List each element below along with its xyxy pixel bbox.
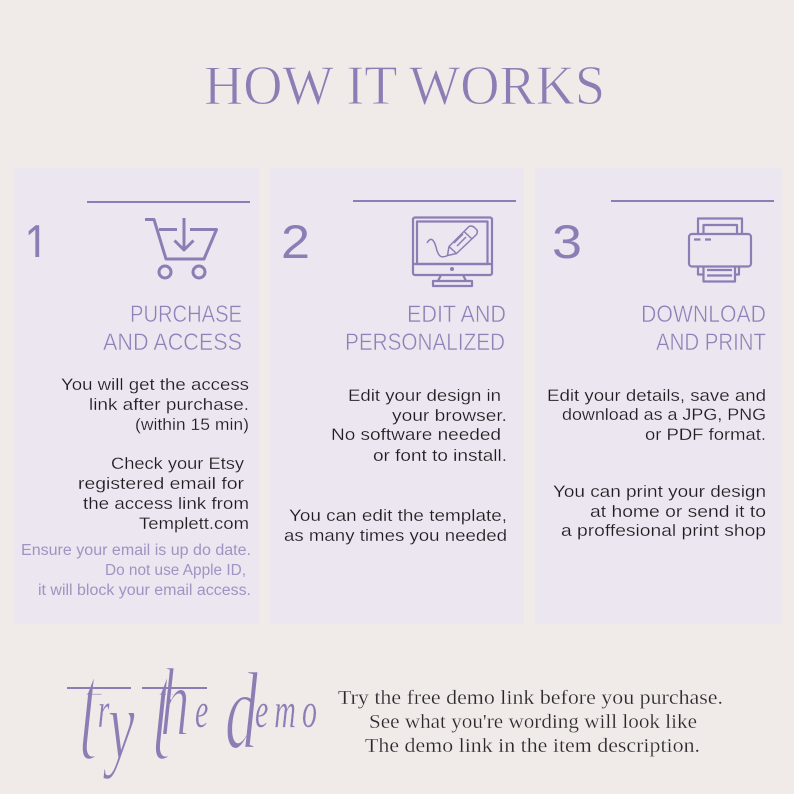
text: check etsy email: the access link from <box>83 494 249 513</box>
text: save and download: download as a JPG, PNG <box>562 405 766 424</box>
heading: download and print: AND PRINT <box>656 329 766 356</box>
script heading: try the demo: t <box>77 627 104 793</box>
text: save and download: Edit your details, save and <box>547 386 766 405</box>
text: demo invitation: Try the free demo link before you purchase. <box>338 687 723 709</box>
note: email warning <box>21 542 251 599</box>
text: unlimited edits: You can edit the template, <box>289 506 507 525</box>
text: check etsy email <box>78 454 249 533</box>
step number 2: 2 <box>281 215 310 268</box>
panel: step 2 edit and personalized <box>270 168 524 624</box>
text: edit in browser: your browser. <box>392 406 507 425</box>
script heading: try the demo <box>67 627 323 793</box>
heading: edit and personalized <box>345 301 506 356</box>
text: demo invitation: See what you're wording will look like <box>369 711 697 733</box>
text: edit in browser: or font to install. <box>373 446 507 465</box>
script heading: try the demo: d <box>225 650 258 772</box>
note: email warning: Do not use Apple ID, <box>105 562 246 579</box>
heading: purchase and access <box>103 301 242 356</box>
step number 3: 3 <box>552 215 582 268</box>
text: check etsy email: registered email for <box>78 474 244 493</box>
step number 1: 1 <box>24 215 48 273</box>
text: check etsy email: Check your Etsy <box>111 454 245 473</box>
panel: step 3 download and print <box>535 168 782 624</box>
panel: step 1 purchase and access <box>22 201 250 598</box>
text: check etsy email: Templett.com <box>139 514 249 533</box>
text: print options: at home or send it to <box>590 502 766 521</box>
script heading: try the demo: h <box>160 649 190 757</box>
heading: download and print <box>641 301 766 356</box>
icon: monitor with pencil <box>413 218 492 286</box>
text: access link details <box>61 375 249 434</box>
title: HOW IT WORKS <box>204 55 605 117</box>
icon: printer <box>689 218 751 282</box>
text: edit in browser: No software needed <box>331 425 501 444</box>
note: email warning: it will block your email access. <box>38 582 251 599</box>
text: unlimited edits <box>284 506 507 545</box>
text: edit in browser: Edit your design in <box>348 386 501 405</box>
note: email warning: Ensure your email is up do date. <box>21 542 251 559</box>
text: print options <box>553 482 766 540</box>
script heading: try the demo: t <box>150 627 177 793</box>
text: demo invitation <box>338 687 723 757</box>
text: print options: You can print your design <box>553 482 766 501</box>
script heading: try the demo: e <box>195 682 208 738</box>
text: access link details: link after purchase. <box>89 395 249 414</box>
text: edit in browser <box>331 386 507 465</box>
text: save and download: or PDF format. <box>645 425 766 444</box>
heading: purchase and access: AND ACCESS <box>103 329 242 356</box>
text: unlimited edits: as many times you needed <box>284 526 507 545</box>
script heading: try the demo: r <box>98 682 110 738</box>
icon: shopping cart with down arrow <box>145 218 216 278</box>
text: access link details: (within 15 min) <box>135 415 249 434</box>
text: save and download <box>547 386 766 444</box>
heading: edit and personalized: EDIT AND <box>407 301 506 328</box>
text: access link details: You will get the access <box>61 375 249 394</box>
heading: download and print: DOWNLOAD <box>641 301 766 328</box>
heading: edit and personalized: PERSONALIZED <box>345 329 505 356</box>
text: print options: a proffesional print shop <box>561 521 766 540</box>
script heading: try the demo: emo <box>255 682 323 738</box>
script heading: try the demo: y <box>103 669 135 780</box>
heading: purchase and access: PURCHASE <box>130 301 242 328</box>
text: demo invitation: The demo link in the item description. <box>365 735 700 757</box>
